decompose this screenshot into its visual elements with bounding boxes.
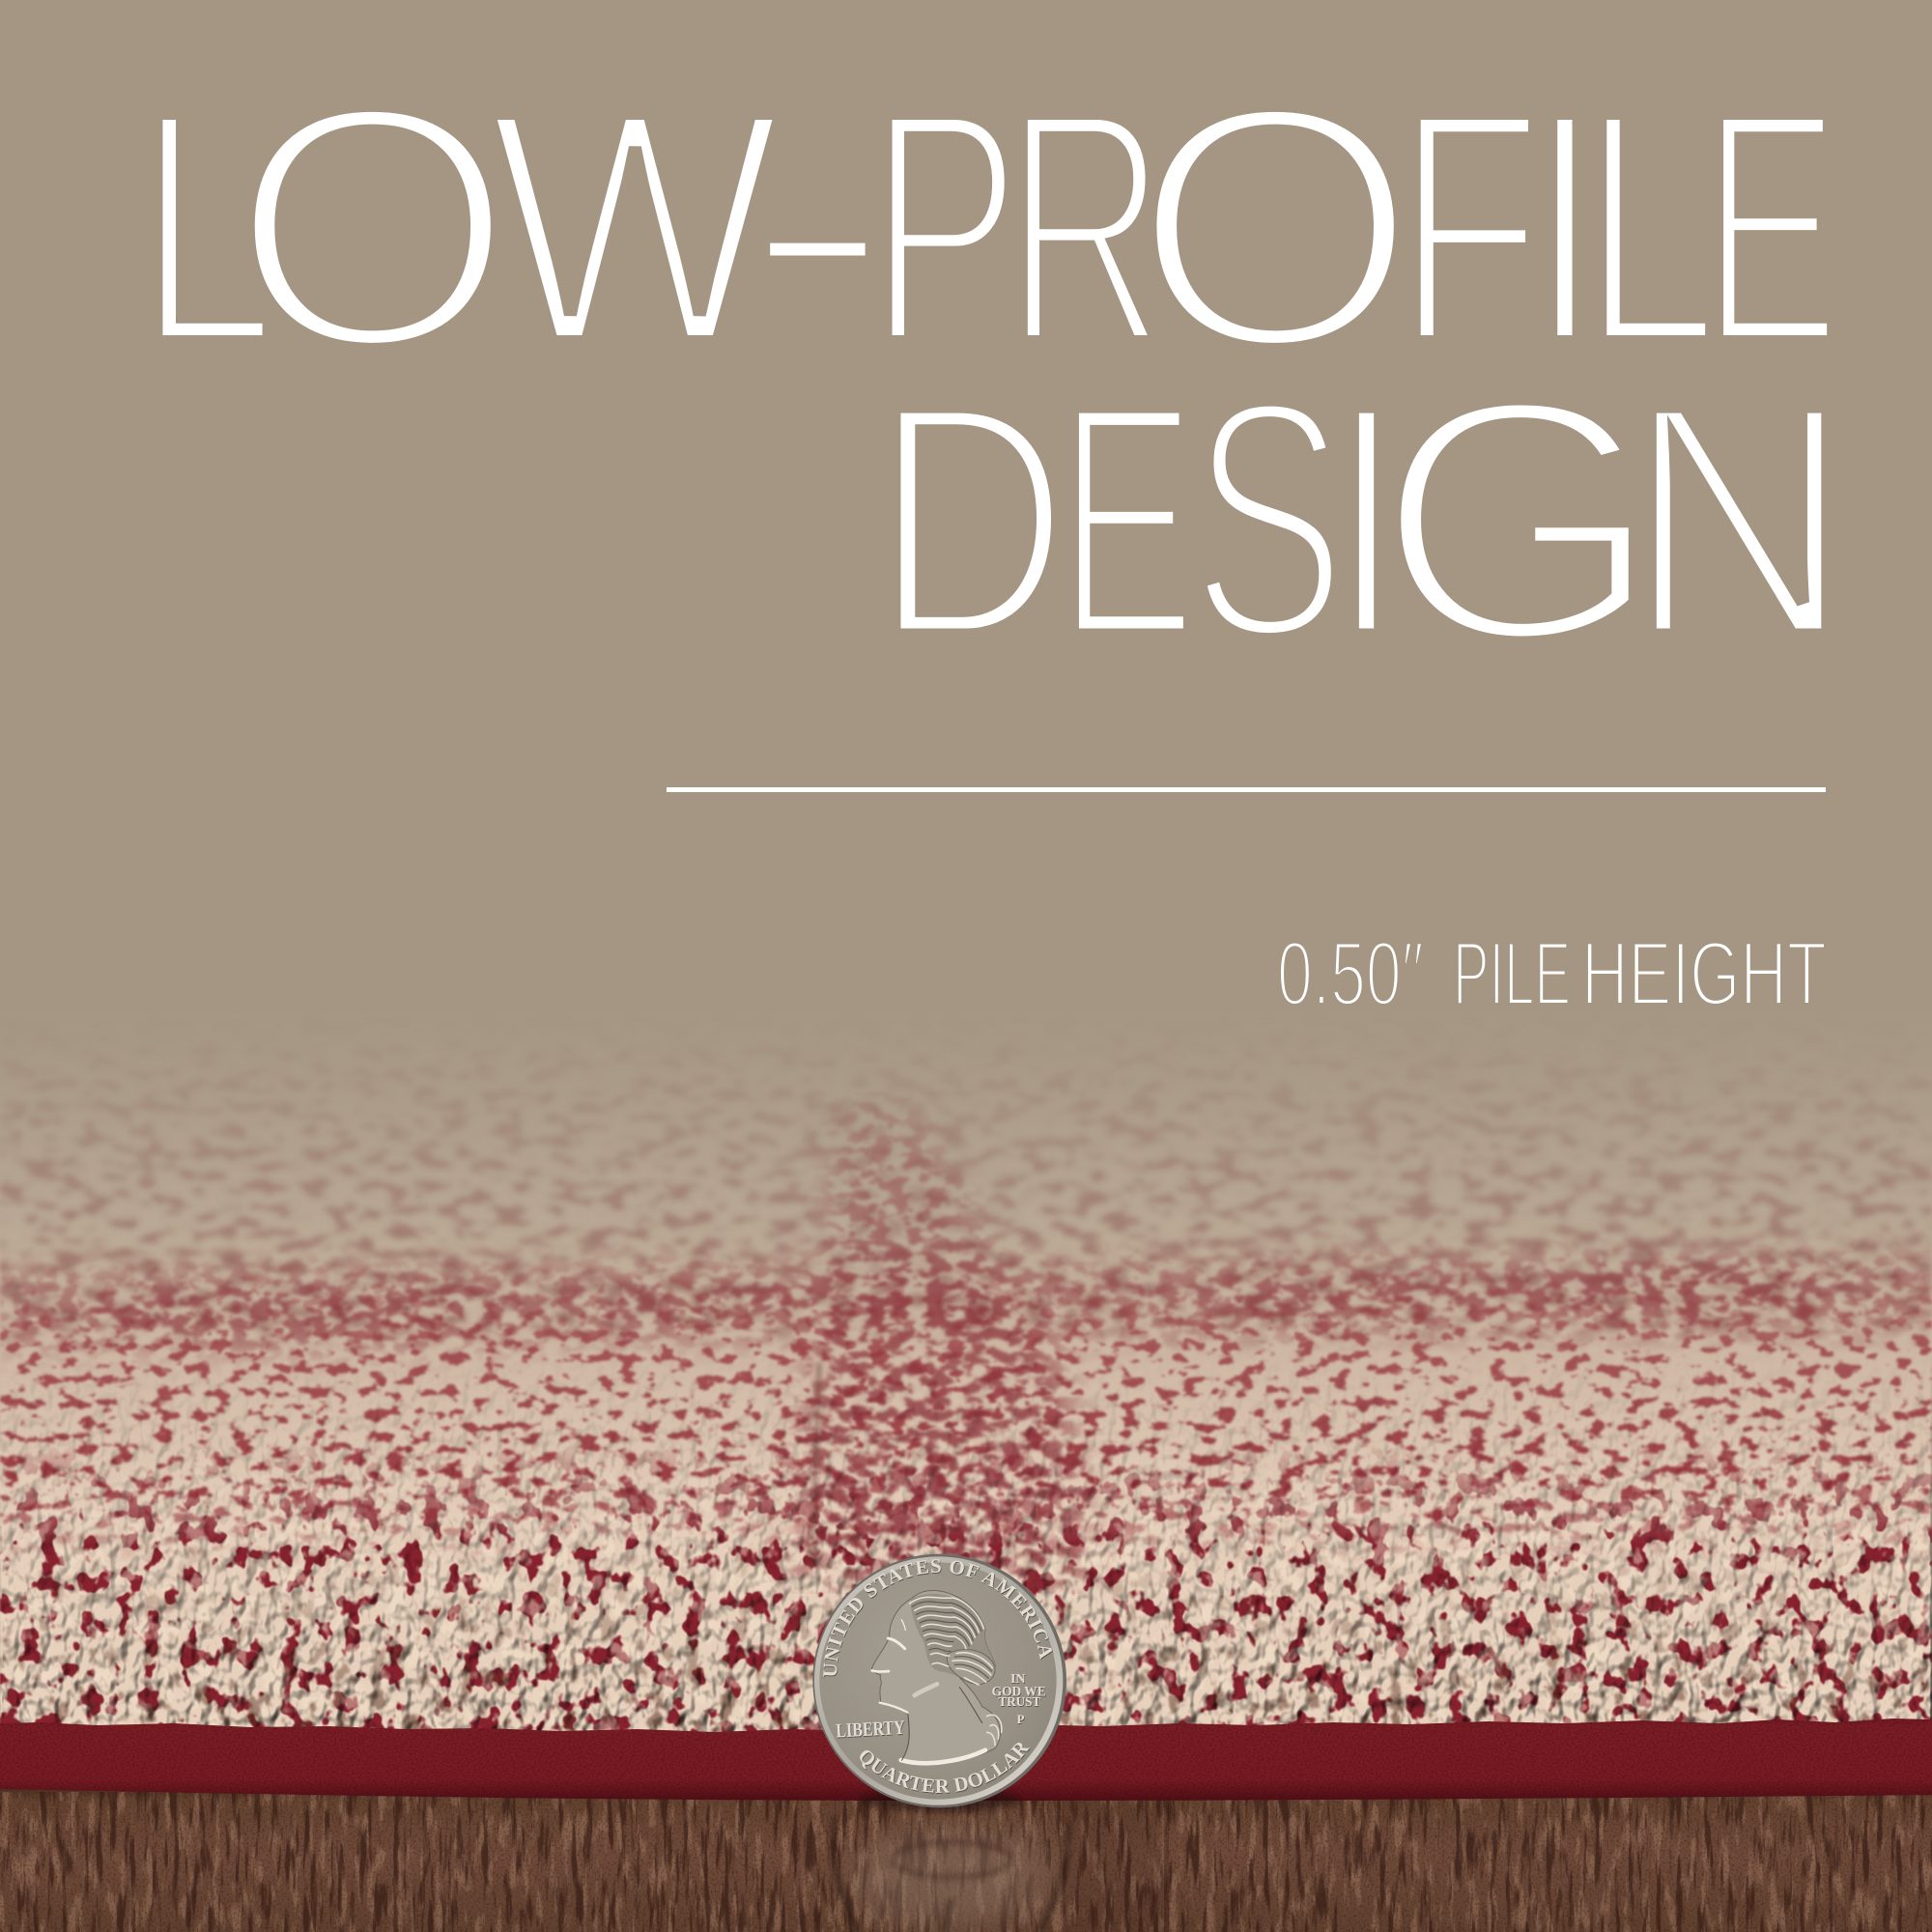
title line 1: - [740,37,895,408]
tuft shadows at rug edge [0,1528,1932,1732]
coin legend text: GOD WE [992,1684,1046,1699]
title line 2: I [1327,333,1406,706]
far speckle, out of focus [0,1062,1932,1349]
coin legend text: IN [1010,1672,1026,1687]
title [137,35,1854,713]
title line 2: G [1375,327,1663,713]
pile height caption [1277,923,1827,1024]
title line 2: S [1191,329,1347,708]
divider rule [667,787,1826,792]
title line 1: P [868,42,1021,412]
title line 1: W [488,41,784,412]
title line 1: O [1132,35,1419,420]
title line 2: D [873,334,1069,706]
near speckle [0,1439,1932,1739]
pile height caption: HEIGHT [1581,923,1827,1024]
coin legend text: UNITED STATES OF AMERICA [823,1559,1053,1677]
darker bands in the rug pattern [0,1092,1932,1594]
title line 1: L [1581,42,1719,413]
pile height caption: PILE [1453,923,1571,1024]
coin body [812,1554,1066,1807]
title line 2 [873,327,1854,713]
title line 2: N [1624,335,1854,706]
middle speckle [0,1256,1932,1565]
title line 1: R [1005,42,1166,413]
rug binding strip [0,1719,1932,1801]
title line 1: I [1525,41,1604,412]
coin: quarter dollar [812,1553,1066,1814]
wood floor [0,1777,1932,1932]
title line 2: E [1058,334,1196,706]
facial highlights [872,1620,985,1763]
seam in pile [811,1362,819,1565]
title line 1: O [230,35,516,420]
pile height caption: 0.50″ [1277,923,1424,1024]
title line 1 [137,35,1840,420]
light tufts [0,1439,1932,1739]
coin shadow [860,1788,1021,1811]
coin portrait [872,1591,1002,1764]
title line 1: L [137,43,275,413]
title line 1: F [1396,41,1543,412]
coin legend text: QUARTER DOLLAR [860,1743,1031,1794]
coin legend text [823,1559,1053,1794]
coin legend text: TRUST [998,1695,1041,1710]
coin legend text: P [1017,1713,1025,1726]
coin legend text: LIBERTY [836,1718,905,1742]
title line 1: E [1702,42,1840,412]
fluffy pile relief [0,1352,1932,1739]
rug pile [0,1095,1932,1732]
